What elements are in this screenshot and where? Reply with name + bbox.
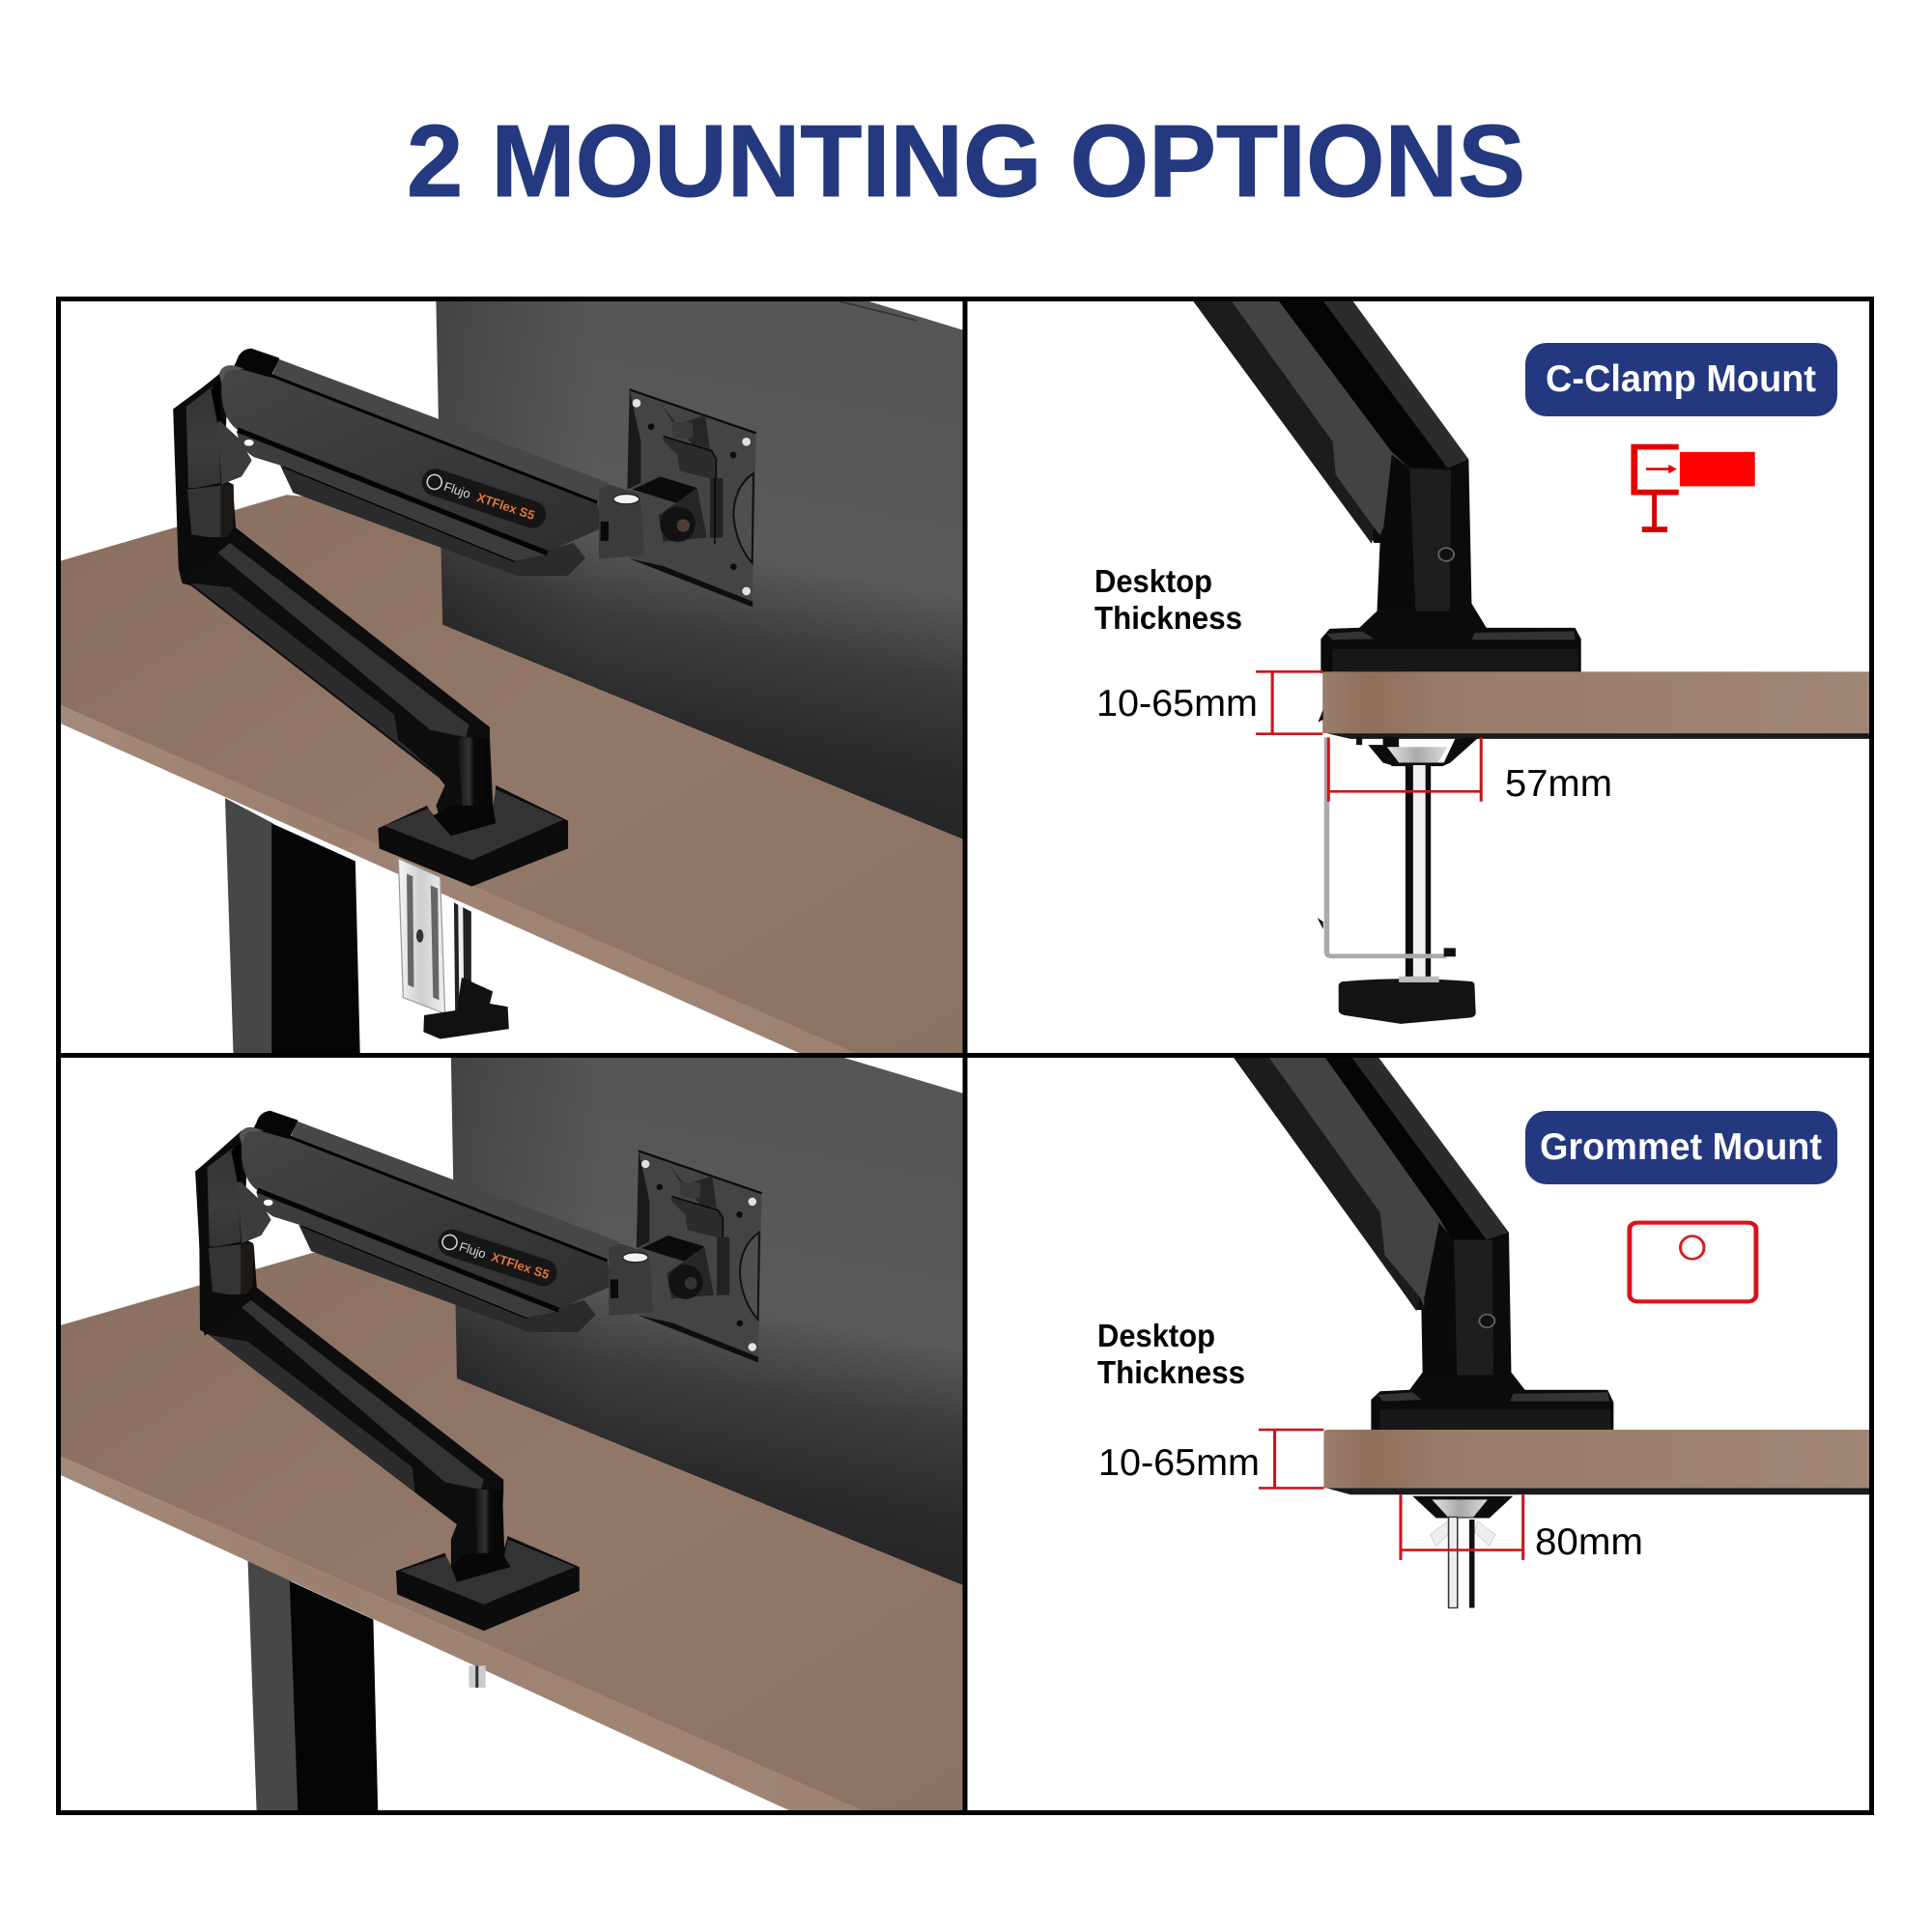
label: 57mm: 57mm <box>1505 763 1612 805</box>
label: desktop thickness: Thickness <box>1094 600 1242 636</box>
desk <box>57 495 965 1065</box>
label: 10-65mm: 10-65mm <box>1096 683 1258 724</box>
clamp hardware <box>1318 710 1479 1024</box>
badge: Grommet Mount: Grommet Mount <box>1540 1126 1822 1168</box>
upper arm and elbow <box>174 349 610 580</box>
label: desktop thickness <box>1094 563 1242 636</box>
panel: grommet perspective photo <box>57 1056 965 1824</box>
badge: Grommet Mount <box>1525 1111 1837 1184</box>
panel: c-clamp side view <box>1191 298 1879 1024</box>
logo badge: Flujo <box>442 479 472 501</box>
VESA plate and tilt joint <box>599 389 756 607</box>
logo badge: XTFlex S5 <box>490 1249 552 1282</box>
panel: c-clamp perspective photo <box>57 298 965 1065</box>
frame grid <box>58 298 1872 1813</box>
logo badge <box>418 466 550 531</box>
label: desktop thickness: Thickness <box>1097 1354 1245 1390</box>
grommet hardware <box>1412 1496 1513 1607</box>
badge: C-Clamp Mount: C-Clamp Mount <box>1546 358 1816 400</box>
upper arm and elbow <box>195 1111 619 1336</box>
lower arm <box>173 376 494 834</box>
badge: C-Clamp Mount <box>1525 343 1837 416</box>
lower arm <box>199 1130 505 1582</box>
desk leg <box>225 798 360 1058</box>
icon: grommet diagram <box>1630 1223 1756 1301</box>
clamp base <box>378 785 568 887</box>
logo badge <box>435 1226 560 1290</box>
monitor <box>436 298 965 839</box>
VESA plate and tilt joint <box>609 1151 762 1362</box>
logo badge: XTFlex S5 <box>475 490 537 523</box>
desk base <box>396 1536 580 1631</box>
label: 80mm: 80mm <box>1535 1521 1643 1563</box>
desk <box>57 1253 965 1824</box>
label: desktop thickness <box>1097 1318 1245 1390</box>
red dimension: 80mm <box>1401 1494 1523 1560</box>
logo badge: Flujo <box>458 1239 488 1262</box>
label: desktop thickness: Desktop <box>1097 1318 1215 1353</box>
label: 10-65mm: 10-65mm <box>1098 1442 1260 1484</box>
label: desktop thickness: Desktop <box>1094 563 1212 599</box>
panel: grommet side view <box>1232 1056 1879 1607</box>
red dimension: desktop thickness <box>1259 1430 1323 1488</box>
desk leg <box>248 1559 378 1816</box>
icon: c-clamp diagram <box>1634 447 1755 532</box>
arm <box>1232 1056 1613 1432</box>
arm <box>1191 298 1581 673</box>
title: 2 MOUNTING OPTIONS <box>407 104 1525 218</box>
grommet bolt <box>469 1665 486 1688</box>
red dimension: desktop thickness <box>1256 671 1322 734</box>
desk edge <box>1322 671 1879 739</box>
clamp hardware <box>398 859 509 1039</box>
desk edge <box>1323 1430 1879 1494</box>
monitor <box>451 1056 965 1586</box>
red dimension: 57mm <box>1328 737 1481 802</box>
